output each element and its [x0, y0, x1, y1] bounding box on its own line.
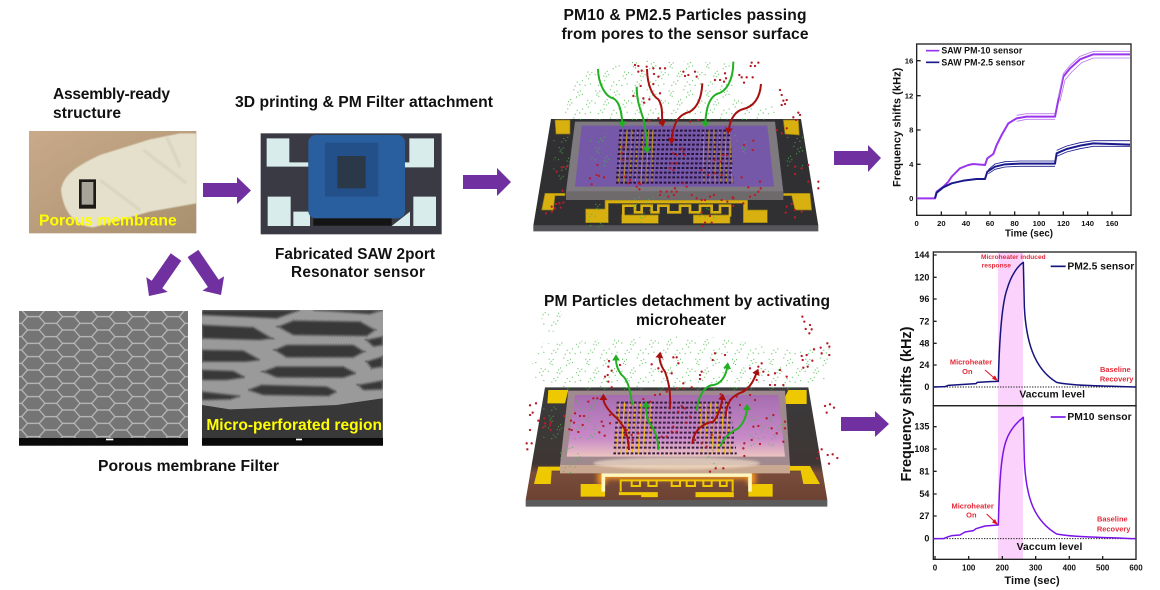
arrow: photo to printed sensor	[203, 177, 251, 204]
heading: assembly-ready structure: Assembly-ready	[53, 86, 170, 103]
x tick labels: 400	[1063, 563, 1077, 572]
annotation: microheater on	[952, 501, 994, 520]
x tick labels	[933, 563, 1143, 572]
label: micro-perforated region: Micro-perforated region	[206, 417, 382, 434]
arrow: microheater on	[987, 514, 998, 525]
line chart: frequency shift versus time	[892, 44, 1131, 240]
y tick labels: 72	[919, 316, 929, 326]
plot frame and ticks	[917, 44, 1131, 215]
legend: SAW PM-2.5 sensor	[941, 57, 1026, 67]
membrane chip	[79, 179, 96, 209]
y tick labels: 4	[909, 160, 914, 169]
caption: fabricated SAW resonator: Resonator sensor	[291, 264, 425, 281]
x tick labels: 100	[1033, 219, 1045, 228]
red particles	[546, 63, 818, 226]
legend	[926, 46, 1026, 67]
shaded band: microheater induced response	[998, 252, 1023, 560]
heading: particle detachment	[544, 293, 830, 329]
x axis title: Time (sec)	[1005, 229, 1053, 240]
heading: particle detachment: microheater	[636, 312, 726, 329]
heading: assembly-ready structure	[53, 86, 170, 122]
arrow: sensor to passing device	[463, 168, 511, 196]
caption: fabricated SAW resonator	[275, 246, 435, 281]
x axis title: Time (sec)	[1004, 575, 1060, 587]
y tick labels	[914, 422, 929, 544]
green particle cloud	[553, 60, 803, 230]
y tick labels: 120	[914, 272, 929, 282]
annotation: microheater induced response: Microheater induced	[981, 254, 1046, 261]
label: vacuum level: Vaccum level	[1017, 542, 1082, 553]
x tick labels: 600	[1129, 563, 1143, 572]
glove finger	[61, 133, 196, 227]
y axis title: Frequency shifts (kHz)	[892, 67, 904, 187]
glowing microheater	[602, 475, 752, 492]
plot frame and ticks	[933, 252, 1136, 406]
heading: particles passing: PM10 & PM2.5 Particles passing	[564, 7, 806, 24]
x tick labels: 300	[1029, 563, 1043, 572]
x tick labels: 0	[915, 219, 919, 228]
annotation: microheater induced response	[981, 254, 1046, 269]
annotation: microheater on: Microheater	[950, 357, 992, 366]
arrow: down right to SEM image	[188, 250, 224, 295]
heading: 3D printing and filter attachment: 3D printing & PM Filter attachment	[235, 94, 494, 111]
label: vacuum level: Vaccum level	[1019, 390, 1085, 401]
red flow arrows	[603, 356, 757, 450]
contact pads	[267, 138, 436, 226]
x tick labels: 80	[1010, 219, 1019, 228]
gold pads	[534, 390, 820, 497]
annotation: baseline recovery: Recovery	[1100, 375, 1134, 384]
x tick labels: 40	[962, 219, 970, 228]
legend: SAW PM-10 sensor	[941, 46, 1023, 56]
y tick labels: 0	[924, 534, 929, 544]
green particle cloud	[532, 312, 830, 473]
arrow: down left to SEM image	[146, 253, 181, 296]
y tick labels	[905, 56, 914, 203]
label: porous membrane: Porous membrane	[39, 213, 177, 230]
y tick labels: 96	[919, 294, 929, 304]
x tick labels: 160	[1106, 219, 1118, 228]
caption: porous membrane filter: Porous membrane Filter	[98, 458, 279, 475]
y tick labels: 0	[909, 194, 913, 203]
annotation: baseline recovery: Recovery	[1097, 524, 1131, 533]
annotation: microheater induced response: response	[982, 262, 1011, 269]
x tick labels: 500	[1096, 563, 1110, 572]
heading: particles passing: from pores to the sensor surface	[562, 26, 809, 43]
x tick labels	[915, 219, 1118, 228]
y tick labels: 16	[905, 56, 913, 65]
caption: fabricated SAW resonator: Fabricated SAW 2port	[275, 246, 435, 263]
pore grid	[616, 130, 733, 183]
y tick labels: 24	[919, 360, 929, 370]
heading: particles passing	[562, 7, 809, 43]
gold pads and electrodes	[542, 120, 812, 223]
red particles	[527, 317, 837, 472]
x tick labels: 140	[1081, 219, 1094, 228]
legend: PM2.5 sensor	[1067, 262, 1134, 273]
PM2.5 trace with error band	[935, 141, 1130, 198]
green flow arrows	[598, 62, 733, 149]
annotation: baseline recovery: Baseline	[1100, 365, 1131, 374]
y tick labels: 12	[905, 91, 913, 100]
y tick labels: 144	[914, 250, 929, 260]
annotation: microheater on	[950, 357, 992, 376]
heading: assembly-ready structure: structure	[53, 105, 121, 122]
PM2.5 response curve	[933, 262, 1136, 387]
green flow arrows	[616, 359, 747, 450]
annotation: microheater on: On	[966, 511, 977, 520]
y tick labels: 135	[914, 422, 929, 432]
red flow arrows	[647, 69, 761, 140]
line chart: PM2.5 sensor response	[914, 250, 1136, 406]
heading: particle detachment: PM Particles detachment by activating	[544, 293, 830, 310]
photo: porous membrane on gloved finger	[29, 131, 196, 233]
annotation: baseline recovery	[1100, 365, 1134, 384]
membrane slab	[560, 391, 790, 473]
arrow: microheater on	[985, 370, 998, 381]
y tick labels: 48	[919, 338, 929, 348]
y tick labels: 108	[914, 444, 929, 454]
y tick labels: 54	[919, 489, 929, 499]
y tick labels: 8	[909, 126, 914, 135]
PM10 trace with error band	[917, 51, 1130, 198]
sensor base	[533, 119, 818, 231]
x tick labels: 200	[996, 563, 1010, 572]
plot frame and ticks	[933, 406, 1136, 559]
device illustration: particles passing through filter	[533, 60, 818, 231]
arrow: passing device to frequency chart	[834, 145, 881, 172]
y tick labels: 27	[919, 511, 929, 521]
x tick labels: 120	[1057, 219, 1070, 228]
x tick labels: 60	[986, 219, 994, 228]
PM10 response curve	[933, 417, 1136, 539]
legend: PM10 sensor	[1067, 412, 1132, 423]
blue printed cap	[308, 135, 405, 226]
arrow: detachment device to response charts	[841, 411, 889, 437]
annotation: microheater on: Microheater	[952, 501, 994, 510]
device illustration: detachment with active microheater	[526, 312, 837, 507]
photo: fabricated SAW sensor with blue cap	[261, 133, 442, 234]
y tick labels: 81	[919, 466, 929, 476]
annotation: baseline recovery: Baseline	[1097, 515, 1128, 524]
x tick labels: 20	[937, 219, 946, 228]
x tick labels: 100	[962, 563, 976, 572]
y tick labels: 0	[924, 382, 929, 392]
pore grid	[613, 403, 737, 454]
y tick labels	[914, 250, 929, 392]
SEM image: micro-perforated region	[202, 310, 383, 446]
membrane slab	[566, 122, 783, 200]
annotation: baseline recovery	[1097, 515, 1131, 533]
x tick labels: 0	[933, 563, 938, 572]
annotation: microheater on: On	[962, 367, 973, 376]
SEM image: honeycomb membrane	[19, 311, 188, 446]
glove folds	[100, 137, 187, 210]
shared y axis title: Frequency shifts (kHz)	[899, 326, 915, 482]
sensor base	[526, 387, 827, 507]
line chart: PM10 sensor response	[914, 406, 1143, 587]
interdigital electrodes	[619, 480, 733, 497]
